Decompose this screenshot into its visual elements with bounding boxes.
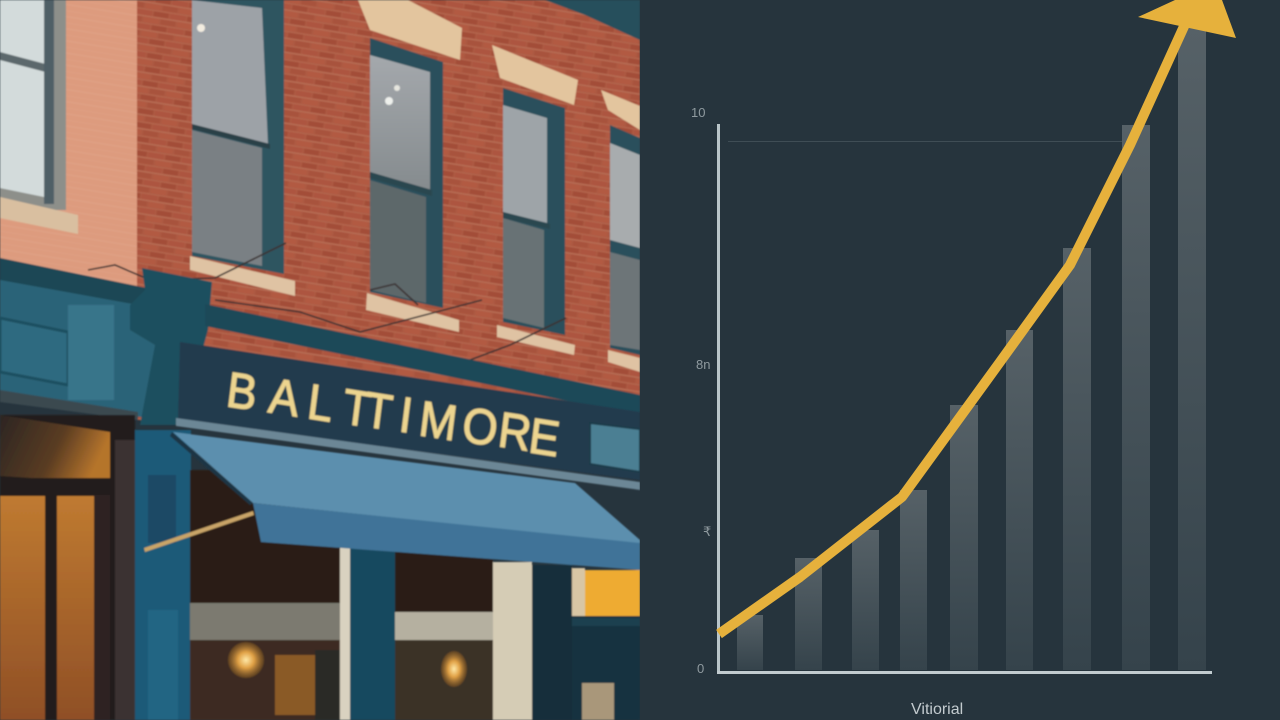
window: fourth: [503, 88, 565, 335]
sign text: BALTTIMORE: [224, 362, 563, 468]
awning pole: [144, 511, 254, 552]
growth arrow line: [719, 22, 1186, 634]
window sill: fifth: [608, 350, 640, 372]
window sill: second: [190, 256, 295, 296]
window: second: [192, 0, 284, 274]
y axis label: middle: 8n: [696, 357, 710, 372]
left storefront fascia: [0, 258, 166, 420]
lintels: [358, 0, 640, 130]
window: fifth: [610, 125, 640, 355]
y axis label: top: 10: [691, 105, 705, 120]
y axis label: lower: ₹: [703, 524, 711, 539]
panel: growth chart: [640, 0, 1280, 720]
x axis label: Vitiorial: [911, 701, 963, 718]
sign panel: [590, 423, 640, 472]
chart background: [640, 0, 1280, 720]
main cornice: [205, 304, 640, 416]
y axis: [717, 124, 720, 673]
overhead wires: [88, 243, 566, 360]
bracket: [130, 268, 212, 425]
brick wall: pale left building: [0, 0, 138, 290]
pilaster: [135, 430, 191, 720]
top gridline: [728, 141, 1130, 142]
window sill: fourth: [497, 325, 575, 355]
strip below sign: [176, 418, 640, 490]
window sill: third: [366, 293, 459, 332]
sign band: [178, 342, 640, 480]
x axis: [717, 671, 1212, 674]
bars: [737, 28, 1206, 670]
y axis label: zero: 0: [697, 661, 704, 676]
window: far left: [0, 0, 78, 234]
panel: storefront photo: [0, 0, 640, 720]
interior: left shop: [0, 415, 135, 720]
pendant lamp left: [228, 642, 264, 678]
awning: [170, 432, 640, 570]
window: third: [370, 38, 443, 308]
shop interior: [190, 470, 640, 720]
growth arrow head: [1138, 0, 1236, 38]
upper cornice corner: [545, 0, 640, 40]
pendant lamp right: [441, 651, 467, 687]
brick wall: red main building: [137, 0, 640, 420]
